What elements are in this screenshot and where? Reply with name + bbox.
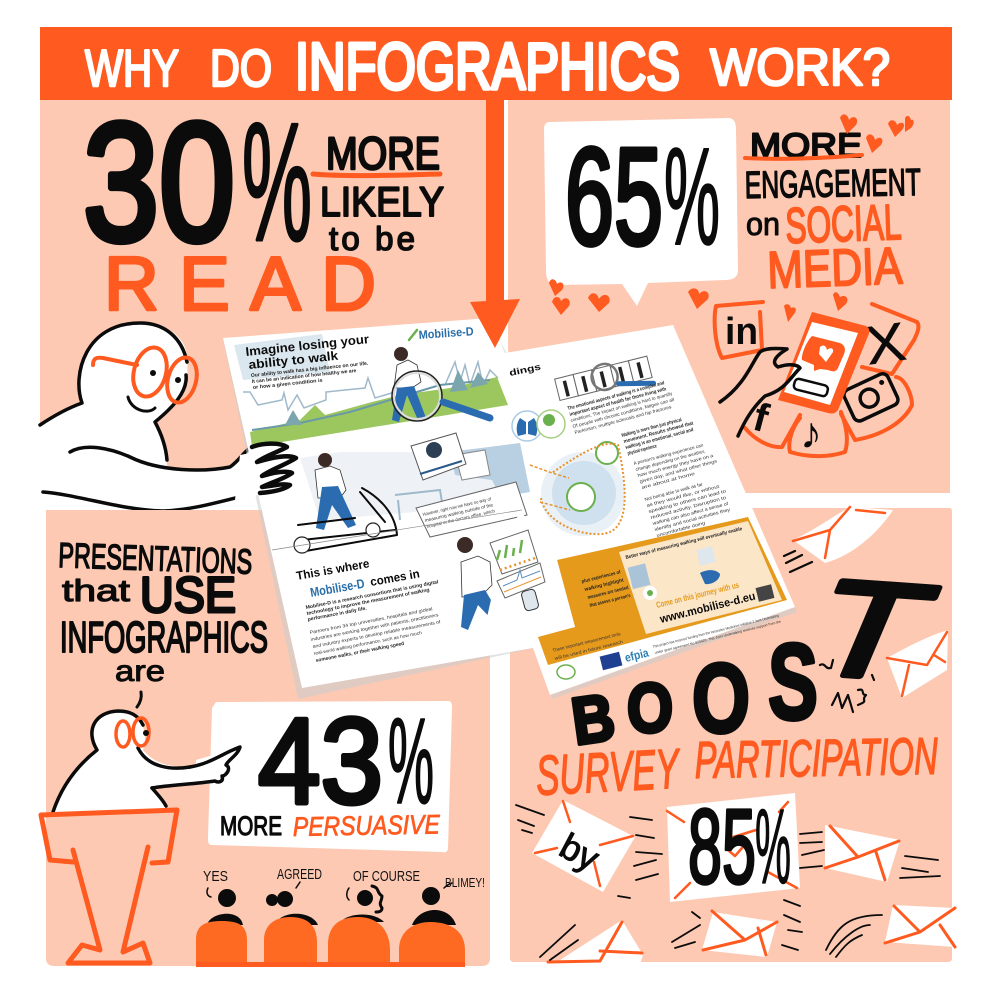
title: WORK? [710,39,890,97]
orange impact box: These important measurement tools [552,631,622,653]
right sheet: findings [480,353,787,679]
right column text: are about at home [641,471,696,490]
title: WHY [85,40,179,98]
orange impact box: walking highlight [583,577,625,593]
right sheet: findings: dings [508,362,542,378]
walking person [457,537,525,630]
right sheet: findings: The emotional aspects of walking is a complex and [567,380,665,412]
hand resting on the sheet [235,444,297,500]
right column text [621,417,731,538]
motion lines [516,805,940,960]
orange impact box: Better ways of measuring walking will eventually enable [625,526,743,561]
audience: AGREED [277,866,322,883]
right column text: walking can also affect a sense of [652,501,729,526]
left sheet: imagine losing your ability: or how a given condition is [253,378,323,391]
right column text: as they would like, or without [646,483,721,508]
envelope: by: by [553,825,606,879]
right column text: reduced activity. Disruption to [650,495,727,520]
right column text: walking is an emotional, social and [624,427,694,451]
heading: presentations that use infographics are: USE [140,567,236,623]
heading: this is where mobilise-d comes in [295,556,442,664]
walking lab illustration: hospital or the doctors office, which [426,508,496,529]
boost sparks [784,551,874,712]
social media icons and phone: X [862,311,910,376]
heading: presentations that use infographics are [58,536,268,707]
label: more likely to be: LIKELY [320,178,444,225]
walking experience diagram [530,442,625,536]
right column text: change depending on the weather, [635,449,706,472]
callout card: 43% more persuasive: MORE [220,811,282,841]
left sheet: imagine losing your ability: Imagine losing your [245,332,370,359]
podium [41,810,177,963]
right column text: speaking to others can lead to [648,488,727,514]
callout card: 43% more persuasive: 43 [258,693,383,829]
panel: boost survey participation: % [755,788,791,906]
heading: presentations that use infographics are: INFOGRAPHICS [60,613,268,662]
heading: this is where mobilise-d comes in: and industry experts to develop reliable measurements of [312,619,442,649]
audience: YES [203,868,228,885]
logos strip: This project has received funding from the Innovative Medicines Initiative 2 Joint Undertaking [652,614,779,649]
logo: Mobilise-D [418,324,474,342]
hearts [549,114,914,322]
left sheet: imagine losing your ability: Our ability to walk has a big influence on our life. [251,361,369,379]
heading: this is where mobilise-d comes in: someone walks, or their walking speed [315,641,405,664]
cityscape illustration [243,362,498,410]
presenter figure [52,711,240,814]
word: boost [567,552,955,758]
right sheet: findings: Of people with chronic conditions, fatigue can all [572,397,675,429]
camera [411,433,466,480]
title: INFOGRAPHICS [295,29,680,103]
logos strip [557,614,781,679]
label: more engagement on social media [744,127,921,300]
heading: presentations that use infographics are: are [115,655,165,688]
organ icons [512,411,542,441]
left sheet: imagine losing your ability: ability to walk [248,349,339,372]
heading: this is where mobilise-d comes in: Partners from 34 top universities, hospitals and global [309,606,433,635]
stat: 30%: 30 [83,88,235,276]
header banner [40,27,952,103]
right sheet: findings: Parkinson, multiple sclerosis and hip fractures [574,404,673,435]
right sheet: findings: important aspect of health for those living with [569,386,667,418]
right column text: Walking is more than just physical [621,417,683,439]
mini charts [490,530,545,611]
panel: boost survey participation [510,507,955,964]
panel: 30% more likely to be read [0,88,487,511]
right column text: how much energy they have on a [637,453,714,478]
orange impact box [538,517,787,665]
orange impact box: will be used in future research [554,639,624,661]
walking lab illustration: However, right now we have no way of [422,496,492,517]
walking lab illustration: measuring walking outside of the [424,502,494,523]
envelopes bottom row [548,905,955,964]
orange impact box: measures are needed [587,585,629,601]
right column text: physical experience [627,443,658,457]
label: more likely to be: to be [329,220,415,257]
panel: presentations that use infographics [41,510,490,967]
label: read: READ [104,242,376,327]
step strip [554,353,654,406]
right column text: identity and social activities they [654,507,731,532]
speech bubble [544,118,738,306]
audience: BLIMEY! [445,875,485,890]
panel: 30% more likely to be read: % [242,88,312,276]
heading: presentations that use infographics are: that [62,573,130,608]
callout card: 43% more persuasive [152,693,452,852]
label: more likely to be: MORE [326,128,440,179]
stat: 65%: 65 [565,120,663,274]
heading: this is where mobilise-d comes in: comes in [369,566,421,589]
card: 85%: 85 [688,788,756,906]
word: boost: S [768,621,818,742]
person with magnifier [392,347,490,422]
heading: survey participation [534,728,938,807]
page overlap sliver [480,510,575,648]
document: infographic sheets [223,318,797,699]
caption box [416,482,527,537]
panel: 65% more engagement on social media: % [664,120,720,274]
right sheet: findings: conditions. The impact on walking is hard to quantify [570,391,673,423]
label: more engagement on social media: SOCIAL [784,194,902,254]
callout card: 43% more persuasive: PERSUASIVE [293,809,441,842]
panel: 65% more engagement on social media [508,100,950,493]
heading: this is where mobilise-d comes in: industries are working together with patients, practitioners [310,612,440,642]
left sheet: imagine losing your ability: It can be an indication of how healthy we are [252,368,357,385]
heading: this is where mobilise-d comes in: Mobilise-D [309,576,366,600]
word: boost: T [788,552,955,708]
orange impact box: plus experiences of [581,569,622,585]
heading: this is where mobilise-d comes in: technology to improve the measurement of walking [306,587,430,617]
heading: this is where mobilise-d comes in: performance in daily life. [307,606,368,623]
orange impact box: www.mobilise-d.eu [658,591,757,626]
heading: this is where mobilise-d comes in: real-world walking performance, such as how much [313,630,423,656]
title: DO [210,40,272,98]
envelope top [793,507,893,563]
right column text: Not being able to walk as far [644,481,704,502]
word: boost: O [627,669,673,747]
word: boost: O [692,643,750,753]
audience [196,866,485,967]
social media icons and phone: f [749,395,774,441]
right column text: given day, and what other things [639,458,718,484]
orange impact box: that assess a person's [589,593,631,609]
envelope: by [532,800,635,892]
character with glasses [0,323,295,511]
arrow from header to document [470,98,520,348]
heading: this is where mobilise-d comes in: Mobilise-D is a research consortium that is using digital [305,579,440,611]
label: more likely to be [313,128,444,257]
logos strip: under grant agreement No 820820. This Joint Undertaking receives support from the [654,620,781,655]
heading: this is where mobilise-d comes in: This is where [295,556,371,583]
callout card: 43% more persuasive: % [388,693,434,829]
label: more engagement on social media: on [746,206,780,242]
heading: presentations that use infographics are: PRESENTATIONS [58,536,253,582]
title [85,29,890,103]
social media icons and phone: in [725,311,758,353]
social media icons and phone: ♪ [800,409,822,458]
right column text: uncomfortable doing [656,520,706,538]
audience: OF COURSE [353,868,420,885]
heading: survey participation: SURVEY [534,736,683,807]
label: more engagement on social media: MEDIA [766,237,904,300]
right column text: A person's walking experience can [633,442,704,466]
right column text: movement. Results showed that [623,420,694,445]
social media icons and phone [715,302,918,458]
envelope right of card [825,825,900,882]
walking lab illustration [294,433,530,553]
word: boost: B [567,679,619,758]
envelope right [887,630,948,698]
orange impact box: Come on this journey with us [655,580,740,610]
left sheet: imagine losing your ability [234,324,530,664]
label: more engagement on social media: MORE [750,127,862,165]
logos strip: efpia [623,645,650,665]
